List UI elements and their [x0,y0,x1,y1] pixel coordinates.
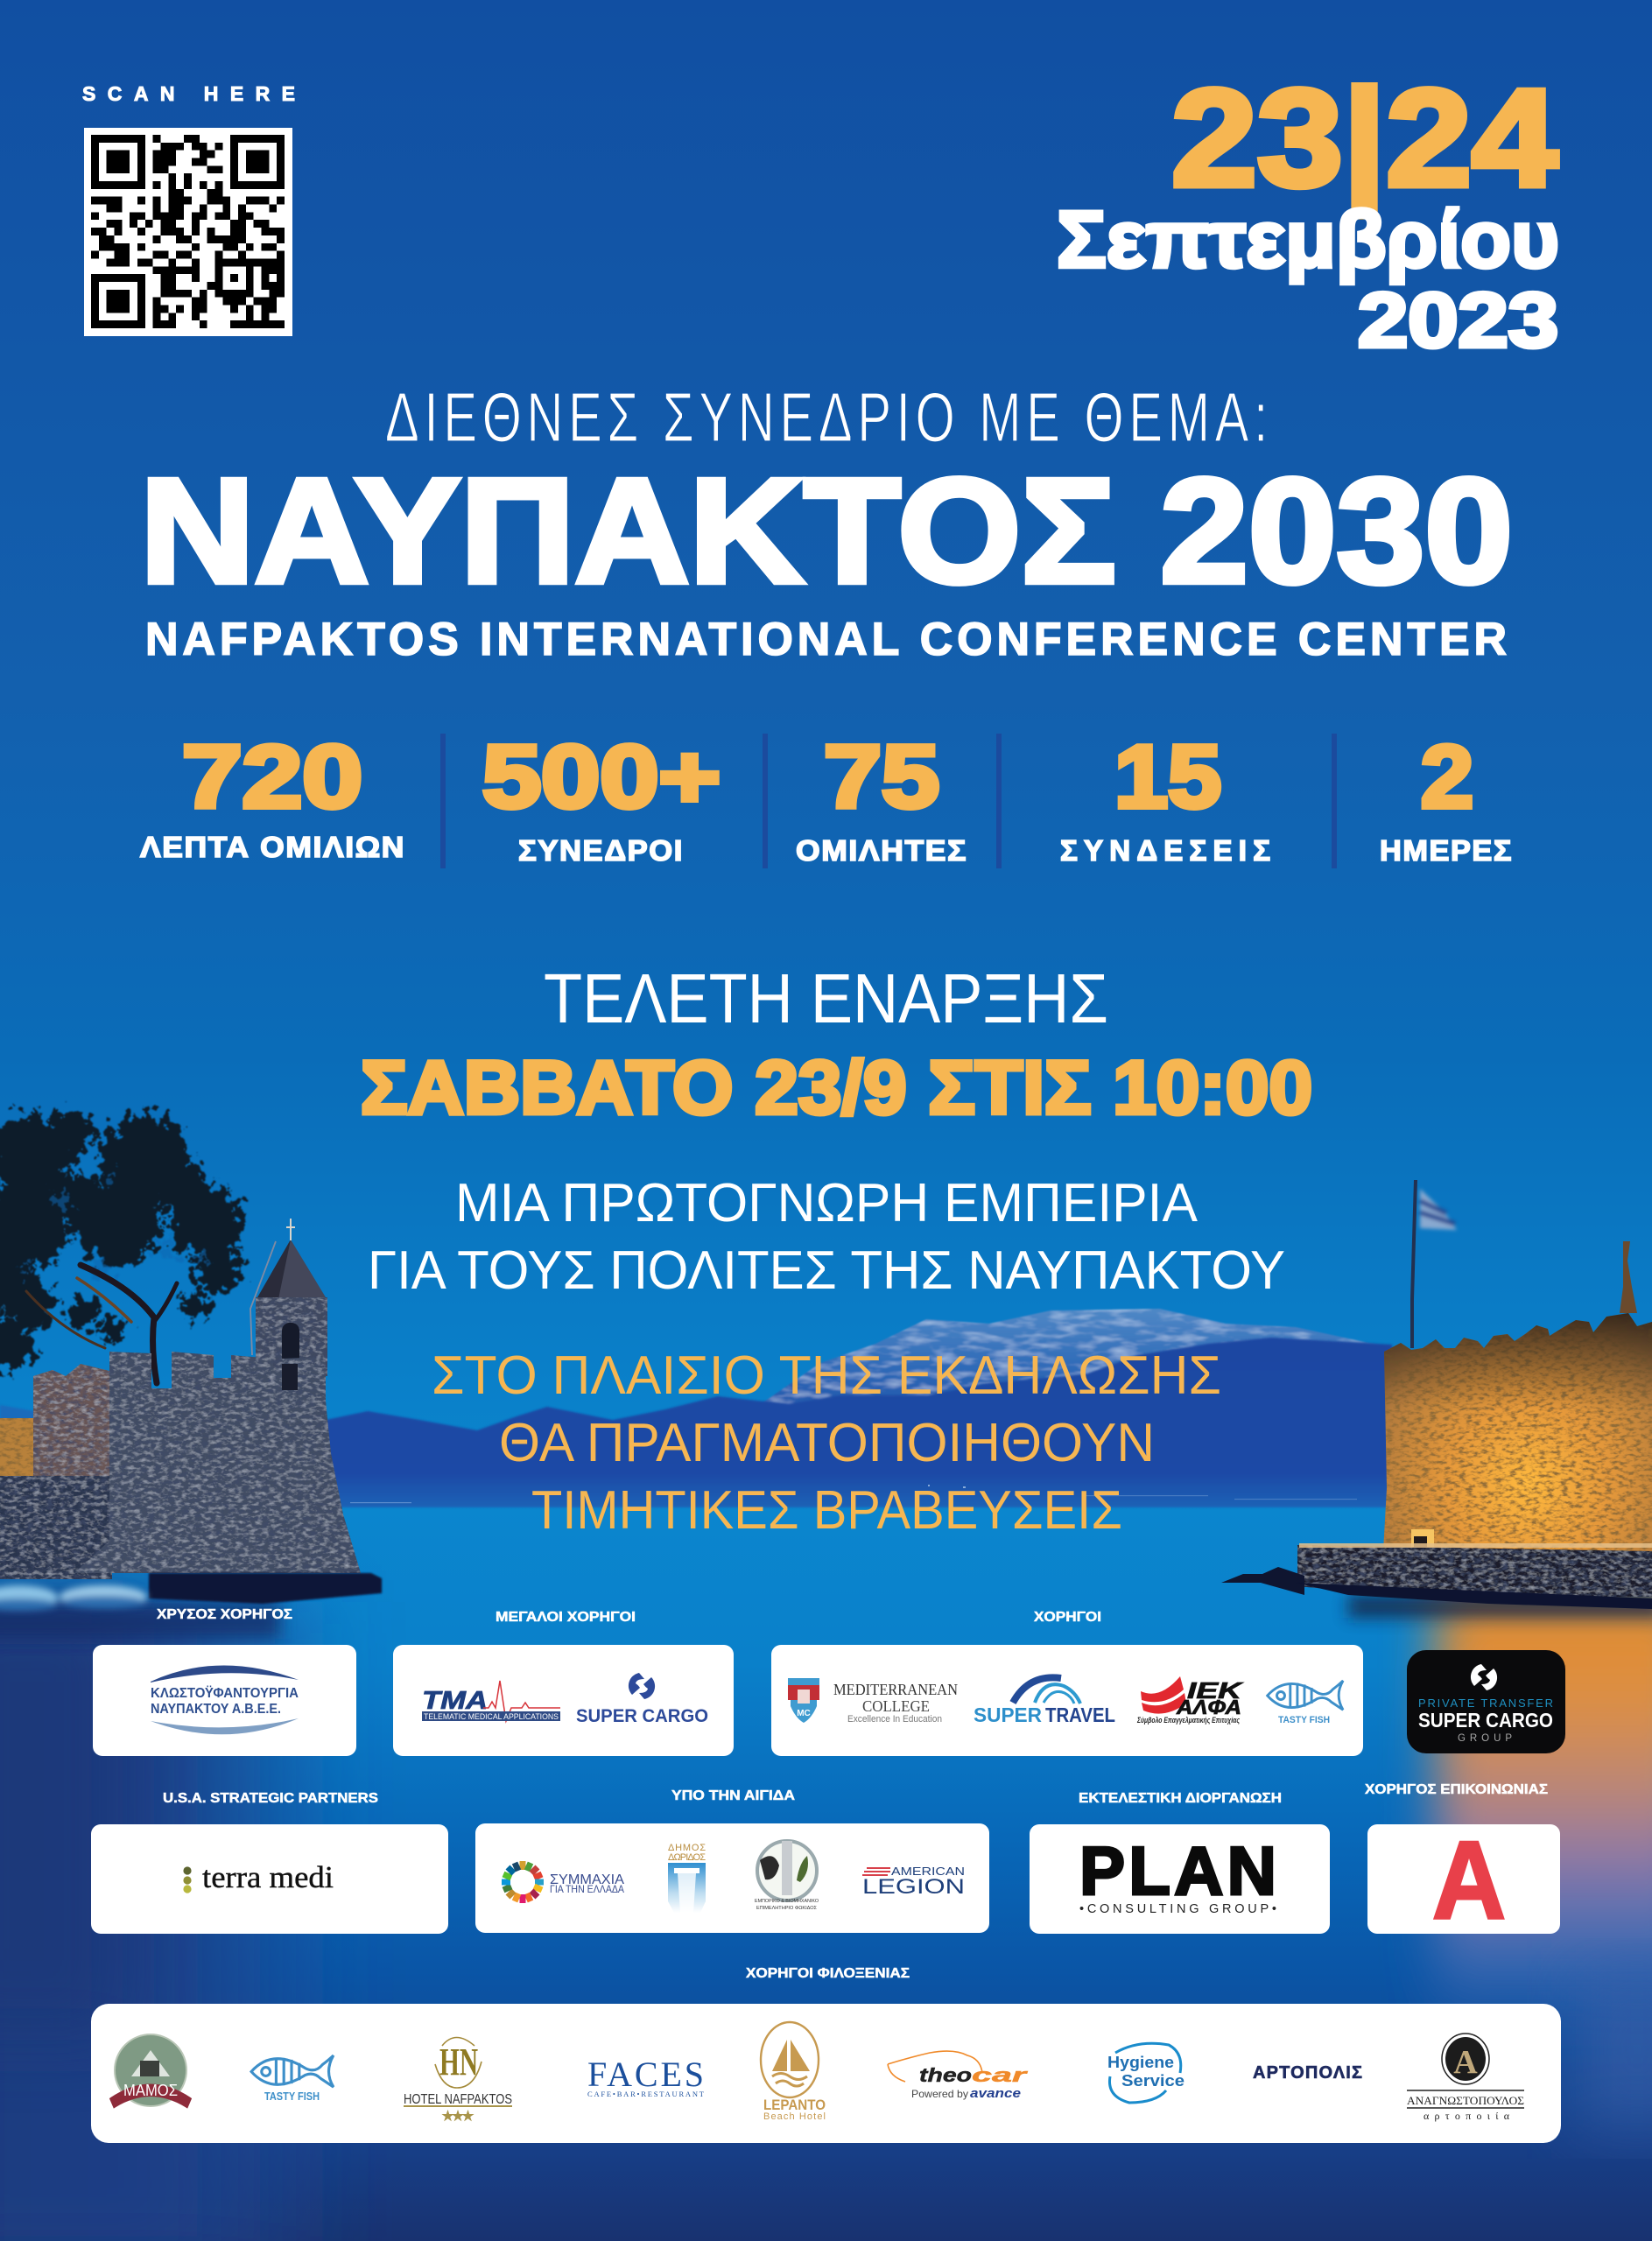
tower body [1379,1309,1652,1556]
stat: 500+ delegates: 500+ [482,728,721,826]
logo: Hotel Nafpaktos: ★★★ [441,2109,475,2124]
quay [1221,1543,1652,1609]
main tower [74,1352,361,1573]
panel: major sponsors [393,1645,734,1756]
logo: Theocar: avance [970,2086,1021,2101]
awards text [432,1345,1221,1541]
logo: IEK Alfa: ΙΕΚ [1187,1677,1244,1704]
year: 2023 [1358,277,1558,363]
sponsor labels: ΕΚΤΕΛΕΣΤΙΚΗ ΔΙΟΡΓΑΝΩΣΗ [1079,1791,1282,1806]
logo: Alpha TV: Α [1432,1818,1506,1942]
stat: 2 days: 2 [1421,728,1473,826]
awards text: ΤΙΜΗΤΙΚΕΣ ΒΡΑΒΕΥΣΕΙΣ [531,1480,1122,1541]
logo: Theocar: Powered by [911,2088,968,2100]
logo: Lepanto Beach Hotel: LEPANTO [763,2097,826,2113]
panel: private transfer: PRIVATE TRANSFER [1418,1697,1553,1710]
logo: Mediterranean College [788,1678,958,1725]
lower wall [0,1476,112,1579]
logo: Chamber of Fokida: ΕΜΠΟΡΙΚΟ & ΒΙΟΜΗΧΑΝΙΚΟ [755,1899,819,1904]
QR code [84,128,292,336]
panel: US strategic partners [91,1824,448,1934]
logo: Hygiene Service [1107,2043,1185,2103]
rear tower [33,1364,109,1478]
logo: Theocar: car [972,2064,1029,2086]
logo: Dimos Doridos [668,1843,706,1913]
logo: Super Cargo: SUPER CARGO [576,1706,708,1726]
main title: ΝΑΥΠΑΚΤΟΣ 2030 [140,448,1513,615]
date: 23|24: 23|24 [1171,61,1557,217]
logo: Klostoyfantoyrgia Nafpaktoy: ΚΛΩΣΤΟΫΦΑΝΤΟΥΡΓΙΑ [151,1685,299,1701]
sponsor labels: ΧΡΥΣΟΣ ΧΟΡΗΓΟΣ [157,1607,292,1622]
panel: organiser [1030,1824,1330,1934]
logo: IEK Alfa [1136,1676,1244,1725]
logo: PLAN Consulting Group: •CONSULTING GROUP• [1079,1902,1276,1916]
logo: Dimos Doridos: ΔΩΡΙΔΟΣ [668,1852,706,1863]
logo: American Legion [862,1865,965,1899]
sponsor labels: ΥΠΟ ΤΗΝ ΑΙΓΙΔΑ [671,1788,795,1803]
logo: Tasty Fish [1268,1681,1343,1725]
scan here label: SCAN HERE [82,82,295,105]
opening ceremony date: ΣΑΒΒΑΤΟ 23/9 ΣΤΙΣ 10:00 [361,1046,1312,1130]
experience text: ΜΙΑ ΠΡΩΤΟΓΝΩΡΗ ΕΜΠΕΙΡΙΑ [455,1173,1199,1233]
logo: terra medi: terra medi [202,1860,334,1894]
stat: 15 connections: ΣΥΝΔΕΣΕΙΣ [1060,834,1270,867]
logo: Artopolis: ΑΡΤΟΠΟΛΙΣ [1253,2063,1362,2083]
logo: IEK Alfa: Σύμβολο Επαγγελματικής Επιτυχίας [1136,1716,1240,1725]
panel: private transfer: GROUP [1458,1733,1512,1744]
statue [1620,1241,1637,1313]
logo: Chamber of Fokida [755,1841,819,1911]
logo: Dimos Doridos: ΔΗΜΟΣ [668,1843,706,1853]
panel: hospitality sponsors [91,2004,1561,2143]
logo: Hygiene Service: Service [1121,2072,1185,2090]
logo: American Legion: LEGION [862,1875,965,1899]
stat: 2 days [1380,728,1513,867]
sponsor labels: ΧΟΡΗΓΟΙ [1034,1610,1101,1625]
logo: Klostoyfantoyrgia Nafpaktoy [151,1665,299,1734]
stat: 2 days: ΗΜΕΡΕΣ [1380,834,1513,867]
logo: Tasty Fish: TASTY FISH [1278,1715,1330,1725]
logo: Super Travel: TRAVEL [1045,1704,1115,1726]
logo: Hotel Nafpaktos [404,2038,512,2124]
sponsor labels: U.S.A. STRATEGIC PARTNERS [163,1791,378,1806]
logo: Hotel Nafpaktos: HN [439,2041,478,2083]
logo: Lepanto Beach Hotel: Beach Hotel [763,2111,826,2122]
logo: Lepanto Beach Hotel [761,2022,826,2122]
logo: Chamber of Fokida: ΕΠΙΜΕΛΗΤΗΡΙΟ ΦΩΚΙΔΟΣ [756,1906,818,1911]
logo: Symmachia [502,1861,624,1903]
logo: Klostoyfantoyrgia Nafpaktoy: ΝΑΥΠΑΚΤΟΥ Α.Β.Ε.Ε. [151,1702,281,1717]
stat: 75 speakers: ΟΜΙΛΗΤΕΣ [796,834,967,867]
lit rear wall [0,1418,35,1478]
water reflection: left castle shadow [0,1602,350,2241]
logo: IEK Alfa: ΑΛΦΑ [1176,1696,1241,1718]
logo: Faces: CAFE•BAR•RESTAURANT [587,2090,705,2098]
stat: 720 minutes: ΛΕΠΤΑ ΟΜΙΛΙΩΝ [140,831,405,863]
distant shore lights [350,1485,1357,1503]
logo: Mediterranean College: COLLEGE [862,1697,930,1715]
panel: under the auspices [475,1823,989,1933]
stats row [140,728,1513,868]
logo: Hotel Nafpaktos: HOTEL NAFPAKTOS [404,2092,512,2107]
sponsor labels: ΧΟΡΗΓΟΙ ΦΙΛΟΞΕΝΙΑΣ [746,1966,910,1981]
right tower [1221,1180,1652,1609]
logo: TMA: TELEMATIC MEDICAL APPLICATIONS [424,1712,559,1721]
stat: 720 minutes: 720 [182,728,362,826]
subtitle: NAFPAKTOS INTERNATIONAL CONFERENCE CENTER [145,614,1511,665]
water reflection: right tower glow [1348,1593,1652,2127]
left castle [0,1111,382,1611]
opening ceremony heading: ΤΕΛΕΤΗ ΕΝΑΡΞΗΣ [544,959,1108,1037]
stat: 75 speakers [796,728,967,867]
sponsor labels: ΜΕΓΑΛΟΙ ΧΟΡΗΓΟΙ [496,1610,636,1625]
logo: Theocar [888,2051,1029,2101]
sponsor labels [157,1607,1548,1981]
logo: Tasty Fish [251,2055,334,2103]
month: Σεπτεμβρίου [1057,195,1559,285]
stat: 15 connections: 15 [1114,728,1221,826]
stat: 720 minutes [140,728,405,863]
logo: Anagnostopoulos bakery: αρτοποιία [1424,2110,1510,2122]
tree [0,1111,243,1383]
experience text [368,1173,1285,1301]
panel: gold sponsor [93,1645,356,1756]
panel: private transfer [1407,1650,1565,1753]
logo: Faces: FACES [587,2055,704,2094]
logo: Symmachia: ΓΙΑ ΤΗΝ ΕΛΛΑΔΑ [550,1883,624,1895]
logo: Super Travel [974,1677,1115,1726]
bell tower [250,1219,327,1376]
logo: Hygiene Service: Hygiene [1107,2054,1174,2071]
logo: Mamos: ΜΑΜΟΣ [123,2082,178,2099]
logo: TMA: TMA [422,1687,488,1715]
flag and pole [1412,1180,1457,1348]
awards text: ΣΤΟ ΠΛΑΙΣΙΟ ΤΗΣ ΕΚΔΗΛΩΣΗΣ [432,1345,1221,1406]
lamp [1411,1529,1434,1549]
logo: PLAN Consulting Group: PLAN [1079,1832,1276,1909]
panel: sponsors [771,1645,1363,1756]
logo: Anagnostopoulos bakery: ΑΝΑΓΝΩΣΤΟΠΟΥΛΟΣ [1407,2094,1524,2107]
conference intro line: ΔΙΕΘΝΕΣ ΣΥΝΕΔΡΙΟ ΜΕ ΘΕΜΑ: [385,378,1273,456]
experience text: ΓΙΑ ΤΟΥΣ ΠΟΛΙΤΕΣ ΤΗΣ ΝΑΥΠΑΚΤΟΥ [368,1240,1285,1301]
logo: Anagnostopoulos bakery: Α [1453,2044,1478,2081]
logo: American Legion: AMERICAN [891,1865,965,1878]
logo: Mamos [112,2034,189,2106]
castle base [149,1573,382,1604]
mountains: snowy ridge [753,1309,1392,1436]
logo: TMA [422,1681,560,1721]
panel: media sponsor [1367,1818,1560,1942]
awards text: ΘΑ ΠΡΑΓΜΑΤΟΠΟΙΗΘΟΥΝ [499,1413,1155,1473]
sponsor labels: ΧΟΡΗΓΟΣ ΕΠΙΚΟΙΝΩΝΙΑΣ [1365,1782,1548,1797]
date block [1057,61,1559,363]
mountains: front range [0,1338,1392,1507]
logo: Tasty Fish: TASTY FISH [264,2090,320,2103]
logo: Mediterranean College: MEDITERRANEAN [833,1681,958,1698]
stat: 500+ delegates [482,728,721,867]
logo: Theocar: theo [919,2064,972,2086]
stat: 75 speakers: 75 [824,728,939,826]
photo: Nafpaktos harbour at dusk [0,1111,1652,2241]
logo: Mediterranean College: Excellence In Education [847,1714,942,1725]
panel: private transfer: SUPER CARGO [1418,1709,1553,1732]
logo: Anagnostopoulos bakery [1407,2034,1524,2122]
logo: Symmachia: ΣΥΜΜΑΧΙΑ [550,1872,624,1887]
logo: Super Cargo [576,1673,708,1726]
boats [0,1585,147,1611]
stat: 500+ delegates: ΣΥΝΕΔΡΟΙ [518,834,684,867]
logo: Mediterranean College: MC [797,1709,811,1718]
stat: 15 connections [1060,728,1270,867]
logo: Super Travel: SUPER [974,1704,1042,1726]
